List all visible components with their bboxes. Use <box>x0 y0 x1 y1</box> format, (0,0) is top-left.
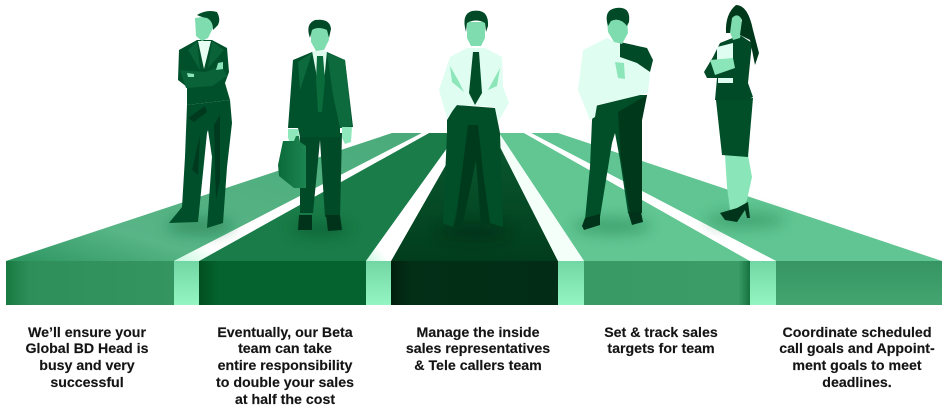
skirt <box>716 98 753 157</box>
jacket <box>288 52 353 137</box>
caption 5: deadlines. <box>822 375 892 391</box>
paper folder <box>717 43 733 65</box>
jacket on shoulder <box>620 42 653 72</box>
hair <box>308 20 331 38</box>
caption 3 <box>406 325 550 374</box>
trousers <box>300 133 342 217</box>
trousers <box>585 95 647 220</box>
face <box>195 16 213 41</box>
hair <box>464 11 488 32</box>
lane 1 top surface <box>6 133 422 261</box>
trousers <box>169 100 232 228</box>
caption 1: We’ll ensure your <box>28 325 146 341</box>
hand <box>615 62 625 79</box>
face <box>467 22 485 46</box>
caption 2 <box>216 325 354 408</box>
face <box>311 28 329 51</box>
caption 5: Coordinate scheduled <box>782 325 932 341</box>
caption 5: ment goals to meet <box>792 358 922 374</box>
face <box>728 13 742 40</box>
caption 3: sales representatives <box>406 341 550 357</box>
caption 3: & Tele callers team <box>414 358 542 374</box>
caption 4: targets for team <box>607 341 715 357</box>
jacket <box>704 35 753 100</box>
shoes <box>582 212 643 230</box>
figure 4: man with jacket over shoulder <box>578 8 653 230</box>
figure 2: businessman with briefcase <box>278 20 353 231</box>
caption 3: Manage the inside <box>417 325 540 341</box>
hair <box>197 11 219 30</box>
hair <box>726 5 759 65</box>
figure 3: man in shirt and tie, hands in pockets <box>439 11 509 227</box>
high heels <box>720 202 750 222</box>
caption 2: team can take <box>238 341 332 357</box>
caption 2: Eventually, our Beta <box>217 325 353 341</box>
face <box>607 20 628 44</box>
white stripes <box>174 133 776 261</box>
lane 4 top surface <box>499 133 750 261</box>
caption 2: at half the cost <box>235 392 335 408</box>
shirt <box>198 41 211 69</box>
shoes <box>298 215 342 231</box>
jacket <box>178 40 230 105</box>
caption 1: successful <box>50 375 124 391</box>
shirt <box>312 51 327 112</box>
briefcase <box>278 136 306 188</box>
caption 4: Set & track sales <box>604 325 718 341</box>
legs <box>725 155 752 213</box>
caption 4 <box>604 325 718 357</box>
figure 1: businesswoman with crossed arms <box>169 11 232 228</box>
caption 5: call goals and Appoint- <box>779 341 935 357</box>
hands <box>288 127 352 146</box>
caption 2: to double your sales <box>216 375 354 391</box>
trousers <box>443 105 503 227</box>
caption 1: Global BD Head is <box>26 341 149 357</box>
lane 3 top surface <box>391 133 558 261</box>
caption 1: busy and very <box>39 358 135 374</box>
figure 5: businesswoman with folder <box>704 5 759 222</box>
lane 5 top surface <box>531 133 942 261</box>
platform: perspective road <box>6 133 942 305</box>
caption 1 <box>26 325 149 391</box>
tie <box>316 56 325 112</box>
lane 2 top surface <box>199 133 458 261</box>
hand and blouse <box>710 58 735 75</box>
figure shadows <box>166 212 785 240</box>
hands <box>187 62 223 77</box>
caption 5 <box>779 325 935 391</box>
caption 2: entire responsibility <box>218 358 353 374</box>
front faces <box>6 261 174 305</box>
shirt <box>439 48 509 122</box>
hair <box>607 8 629 26</box>
shirt <box>578 38 650 120</box>
tie <box>469 52 482 105</box>
